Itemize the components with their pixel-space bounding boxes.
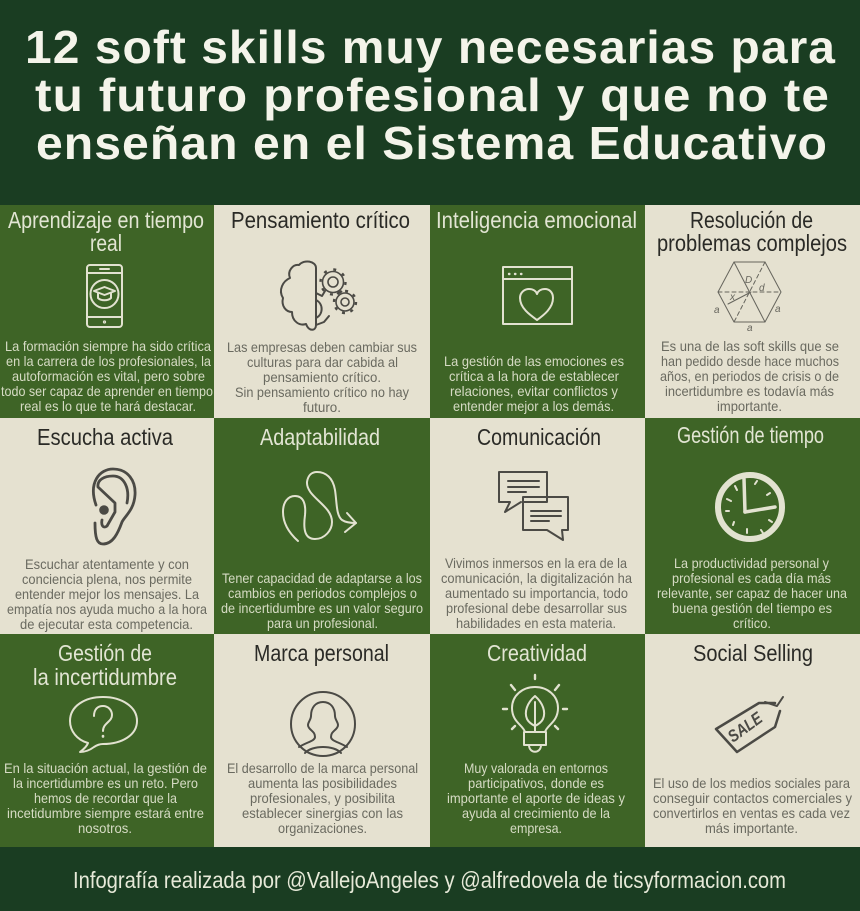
heading: Gestión de la incertidumbre: la incertidumbre <box>33 664 177 690</box>
text: Incertidumbre description: En la situación actual, la gestión de <box>4 760 207 776</box>
panel: Gestión de tiempo <box>645 418 860 634</box>
text: Comunicación description: Vivimos inmersos en la era de la <box>445 555 627 571</box>
icon: sale tag: SALE <box>724 708 767 746</box>
heading: Aprendizaje en tiempo real <box>8 207 204 256</box>
text: Adaptabilidad description: para un profesional. <box>267 615 378 631</box>
text: Creatividad description <box>447 760 625 836</box>
heading: Marca personal: Marca personal <box>254 640 389 666</box>
text: Gestión de tiempo description: crítico. <box>733 615 771 631</box>
panel: Resolución de problemas complejos <box>645 205 860 418</box>
text: Resolución description: Es una de las soft skills que se <box>661 338 839 354</box>
heading: Pensamiento crítico: Pensamiento crítico <box>231 207 410 233</box>
panel: Adaptabilidad <box>214 418 430 634</box>
heading: Aprendizaje en tiempo real: real <box>90 230 122 256</box>
icon: hexagon geometry: x <box>729 292 736 303</box>
text: Incertidumbre description: la incertidumbre es un reto. Pero <box>13 775 198 791</box>
text: Incertidumbre description: incetidumbre siempre estará entre <box>7 805 204 821</box>
icon: winding arrow <box>283 472 356 541</box>
text: Gestión de tiempo description: buena gestión del tiempo es <box>672 600 832 616</box>
text: Aprendizaje description <box>1 338 213 414</box>
heading: Gestión de tiempo: Gestión de tiempo <box>677 422 824 448</box>
text: Escucha description: Escuchar atentamente y con <box>25 556 189 572</box>
text: Comunicación description: habilidades en esta materia. <box>456 615 616 631</box>
text: Adaptabilidad description <box>221 570 423 631</box>
text: Aprendizaje description: real es lo que te hará destacar. <box>20 398 196 414</box>
title: enseñan en el Sistema Educativo <box>36 117 828 169</box>
text: Comunicación description: comunicación, la digitalización ha <box>441 570 632 586</box>
text: Pensamiento description <box>227 339 417 415</box>
text: Inteligencia description: entender mejor a los demás. <box>453 398 614 414</box>
text: Resolución description: importante. <box>717 398 782 414</box>
text: Adaptabilidad description: Tener capacidad de adaptarse a los <box>222 570 422 586</box>
heading: Creatividad: Creatividad <box>487 640 587 666</box>
panel: Comunicación <box>430 418 645 634</box>
icon: browser window with heart <box>503 267 572 324</box>
text: Incertidumbre description <box>4 760 207 836</box>
text: Gestión de tiempo description: La productividad personal y <box>674 555 829 571</box>
icon: clock <box>718 475 782 539</box>
heading: Aprendizaje en tiempo real: Aprendizaje en tiempo <box>8 207 204 233</box>
panel: Inteligencia emocional <box>430 205 645 418</box>
text: Resolución description: incertidumbre es todavía más <box>665 383 834 399</box>
text: Marca personal description: profesionales, y posibilita <box>250 790 395 806</box>
text: Inteligencia description: relaciones, evitar conflictos y <box>450 383 618 399</box>
heading: Adaptabilidad: Adaptabilidad <box>260 424 380 450</box>
icon: hexagon geometry <box>714 262 781 334</box>
icon: question speech bubble <box>70 697 137 752</box>
title: tu futuro profesional y que no te <box>35 69 830 121</box>
text: Marca personal description: aumenta las posibilidades <box>248 775 397 791</box>
icon: hexagon geometry: a <box>775 304 781 315</box>
text: Creatividad description: Muy valorada en entornos <box>464 760 608 776</box>
text: Adaptabilidad description: de incertidumbre es un valor seguro <box>221 600 423 616</box>
icon: hexagon geometry: d <box>759 283 765 294</box>
heading: Gestión de la incertidumbre: Gestión de <box>58 640 152 666</box>
text: Resolución description <box>660 338 839 414</box>
text: Creatividad description: ayuda al crecimiento de la <box>462 805 610 821</box>
text: Pensamiento description: culturas para dar cabida al <box>247 354 398 370</box>
heading: Resolución de problemas complejos: Resolución de <box>690 207 813 233</box>
text: Escucha description: empatía nos ayuda mucho a la hora <box>7 601 207 617</box>
text: Escucha description: de ejecutar esta competencia. <box>20 616 193 632</box>
heading: Escucha activa: Escucha activa <box>37 424 173 450</box>
panel: Marca personal <box>214 634 430 847</box>
icon: sale tag <box>716 697 783 752</box>
text: Resolución description: años, en periodos de crisis o de <box>660 368 839 384</box>
panel: Aprendizaje en tiempo real <box>0 205 214 418</box>
text: Escucha description: conciencia plena, nos permite <box>22 571 192 587</box>
heading: Inteligencia emocional: Inteligencia emocional <box>436 207 637 233</box>
text: Aprendizaje description: todo ser capaz de aprender en tiempo <box>1 383 213 399</box>
panel: Pensamiento crítico <box>214 205 430 418</box>
text: Creatividad description: participativos, donde es <box>468 775 604 791</box>
text: Resolución description: han pedido desde hace muchos <box>661 353 839 369</box>
icon: ear <box>93 469 135 544</box>
text: Inteligencia description <box>444 353 624 414</box>
text: Pensamiento description: futuro. <box>303 399 341 415</box>
text: Pensamiento description: Sin pensamiento crítico no hay <box>235 384 409 400</box>
text: Pensamiento description: Las empresas deben cambiar sus <box>227 339 417 355</box>
icon: light bulb with leaf <box>503 675 567 752</box>
heading: Social Selling: Social Selling <box>693 640 813 666</box>
icon: hexagon geometry: D <box>745 275 752 286</box>
text: Marca personal description: organizaciones. <box>278 820 367 836</box>
text: Comunicación description <box>441 555 632 631</box>
text: Incertidumbre description: nosotros. <box>78 820 132 836</box>
panel: Social Selling <box>645 634 860 847</box>
text: Inteligencia description: La gestión de las emociones es <box>444 353 624 369</box>
text: Creatividad description: importante el aporte de ideas y <box>447 790 625 806</box>
text: Aprendizaje description: autoformación es vital, pero sobre <box>12 368 205 384</box>
icon: hexagon geometry: a <box>714 305 720 316</box>
text: Aprendizaje description: en la carrera de los profesionales, la <box>6 353 211 369</box>
text: Comunicación description: aumentado su importancia, todo <box>445 585 628 601</box>
title <box>25 21 836 169</box>
heading: Gestión de la incertidumbre <box>33 640 177 690</box>
icon: person in circle <box>291 692 355 756</box>
text: Inteligencia description: crítica a la hora de establecer <box>449 368 619 384</box>
title: 12 soft skills muy necesarias para <box>25 21 836 73</box>
icon: chat bubbles <box>499 472 568 540</box>
text: Social Selling description <box>653 775 852 836</box>
text: Social Selling description: más importante. <box>705 820 798 836</box>
text: Marca personal description <box>227 760 418 836</box>
text: Adaptabilidad description: cambios en periodos complejos o <box>228 585 417 601</box>
heading: Comunicación: Comunicación <box>477 424 601 450</box>
text: Marca personal description: El desarrollo de la marca personal <box>227 760 418 776</box>
text: Marca personal description: establecer sinergias con las <box>242 805 403 821</box>
heading: Resolución de problemas complejos <box>657 207 847 256</box>
panel: Gestión de la incertidumbre <box>0 634 214 847</box>
icon: smartphone with graduation cap <box>87 265 122 327</box>
panel: Creatividad <box>430 634 645 847</box>
text: Incertidumbre description: hemos de recordar que la <box>34 790 177 806</box>
text: Escucha description: entender mejor los mensajes. La <box>15 586 199 602</box>
text: Escucha description <box>7 556 207 632</box>
text: Comunicación description: profesional debe desarrollar sus <box>446 600 627 616</box>
text: Gestión de tiempo description <box>657 555 847 631</box>
icon: hexagon geometry: a <box>747 323 753 334</box>
text: Aprendizaje description: La formación siempre ha sido crítica <box>5 338 211 354</box>
text: Creatividad description: empresa. <box>510 820 562 836</box>
icon: brain with gears <box>281 261 356 330</box>
text: Pensamiento description: pensamiento crítico. <box>263 369 381 385</box>
text: Gestión de tiempo description: profesional es cada día más <box>672 570 831 586</box>
panel: Escucha activa <box>0 418 214 634</box>
